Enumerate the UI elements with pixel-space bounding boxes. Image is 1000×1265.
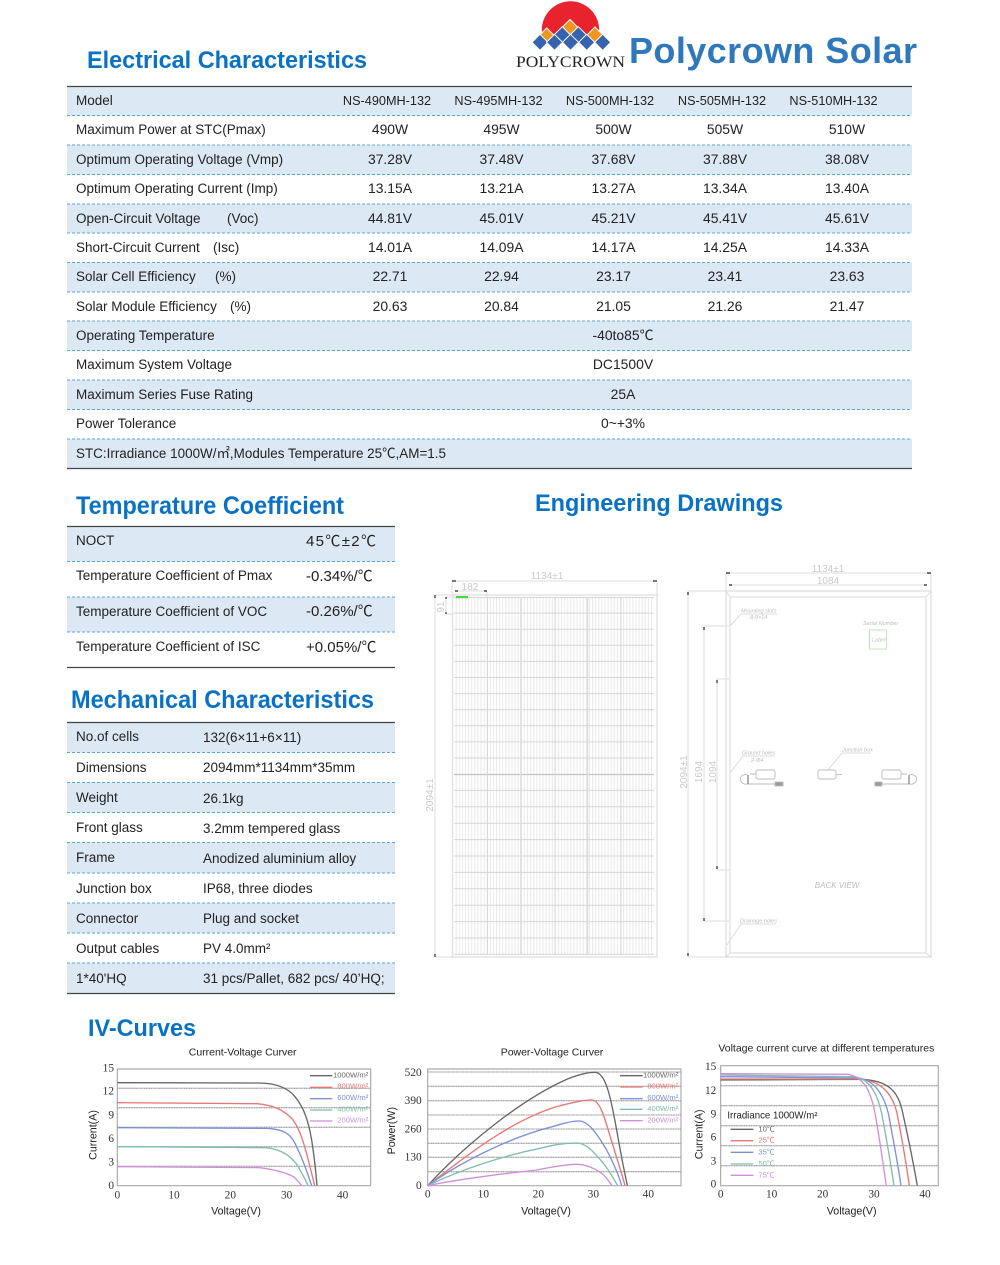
row: cell efficiency: Solar Cell Efficiency: [76, 269, 196, 284]
row: Imp: 13.21A: [479, 180, 524, 196]
note: mounting slots: [730, 608, 777, 626]
x axis ticks: [425, 1189, 654, 1201]
icon: right connector: [875, 770, 916, 786]
row: cell efficiency: 23.41: [708, 268, 743, 284]
legend: irradiance and temperatures: [727, 1111, 818, 1179]
row: module efficiency: [76, 298, 865, 314]
row: cell efficiency: [76, 268, 865, 284]
chart: power-voltage curve: [386, 1047, 681, 1218]
row: connector: [76, 911, 299, 926]
legend: 200W/m²: [647, 1115, 679, 1124]
legend: irradiance and temperatures: 25℃: [758, 1136, 775, 1145]
row: model: NS-495MH-132: [454, 94, 543, 108]
row: Pmax coefficient: -0.34%/℃: [306, 568, 373, 585]
row: Voc: 45.21V: [591, 210, 636, 226]
row: output cables: Output cables: [76, 941, 160, 956]
row: Pmax coefficient: Temperature Coefficient of Pmax: [76, 568, 273, 583]
heading: Temperature Coefficient: Temperature Coefficient: [76, 492, 345, 520]
x axis title: Voltage(V): [521, 1206, 571, 1218]
row: Vmp: 38.08V: [825, 151, 870, 167]
row: module efficiency: Solar Module Efficiency: [76, 299, 217, 314]
row: dimensions: [76, 760, 355, 775]
row: ISC coefficient: +0.05%/℃: [306, 639, 376, 656]
legend: 600W/m²: [647, 1093, 679, 1102]
row: Isc: 14.25A: [703, 239, 748, 255]
x axis ticks: 40: [643, 1189, 654, 1201]
row: front glass: [76, 820, 341, 836]
heading: Electrical Characteristics: Electrical Characteristics: [87, 47, 367, 74]
x axis ticks: 20: [533, 1189, 544, 1201]
row: Vmp: 37.48V: [479, 151, 524, 167]
dimension: cell height: 91: [436, 601, 447, 613]
x axis ticks: 30: [281, 1190, 293, 1202]
row: NOCT: [76, 533, 376, 550]
row: Vmp: 37.88V: [703, 151, 748, 167]
row: Isc: 14.33A: [825, 239, 870, 255]
x axis ticks: 10: [478, 1189, 489, 1201]
row: maximum power: 505W: [707, 121, 744, 137]
row: model: NS-510MH-132: [789, 94, 878, 108]
legend: 200W/m²: [337, 1116, 369, 1125]
row: Vmp: [76, 151, 870, 167]
legend: 800W/m²: [337, 1082, 369, 1091]
row: power tolerance: 0~+3%: [601, 415, 645, 431]
y axis ticks: [103, 1063, 114, 1192]
y axis ticks: 390: [405, 1095, 422, 1107]
row: maximum power: 500W: [595, 121, 633, 137]
chart: current-voltage curve: [88, 1047, 371, 1218]
y axis ticks: 12: [103, 1086, 114, 1098]
row: cells: No.of cells: [76, 729, 139, 744]
row: Imp: 13.15A: [368, 180, 413, 196]
note: drainage holes: [727, 918, 777, 945]
row: Isc: Short-Circuit Current: [76, 240, 200, 255]
row: maximum power: 490W: [372, 121, 409, 137]
x axis ticks: 20: [225, 1190, 236, 1202]
row: fuse rating: [76, 386, 636, 402]
note: serial number label: Serial Number: [863, 621, 899, 627]
curves: [117, 1083, 317, 1186]
y axis ticks: [705, 1061, 717, 1191]
row: weight: 26.1kg: [203, 791, 244, 806]
row: Imp: [76, 180, 870, 196]
row: Imp: Optimum Operating Current (Imp): [76, 181, 278, 196]
row: Imp: 13.40A: [825, 180, 870, 196]
row: front glass: 3.2mm tempered glass: [203, 821, 341, 836]
note: ground holes: [730, 750, 775, 773]
row: output cables: [76, 941, 271, 956]
row: model: NS-500MH-132: [566, 94, 654, 108]
note: junction box: [828, 748, 873, 770]
brand name: Polycrown Solar: [629, 30, 917, 71]
row: Vmp: 37.68V: [591, 151, 636, 167]
chart title: Voltage current curve at different temperatures: [718, 1044, 934, 1055]
row: NOCT: 45℃±2℃: [306, 533, 376, 550]
y axis ticks: 15: [103, 1063, 114, 1075]
heading: Engineering Drawings: Engineering Drawings: [535, 490, 783, 517]
y axis title: Current(A): [694, 1109, 706, 1159]
row: operating temperature: [76, 327, 654, 343]
note: mounting slots: 8-9×14: [750, 615, 767, 621]
y axis ticks: [405, 1067, 422, 1192]
legend: 1000W/m²: [643, 1070, 679, 1079]
heading: IV-Curves: IV-Curves: [88, 1015, 196, 1042]
x axis ticks: 30: [588, 1189, 599, 1201]
row: container: [76, 971, 385, 986]
chart: current-voltage at different temperatures: [694, 1044, 938, 1218]
x axis ticks: 0: [718, 1188, 724, 1200]
row: Isc: 14.09A: [479, 239, 524, 255]
dimension: back length: 2094±1: [679, 755, 690, 789]
y axis ticks: 9: [711, 1108, 717, 1120]
icon: central junction box: [818, 770, 842, 779]
row: model: NS-505MH-132: [678, 94, 766, 108]
row: Voc: 45.01V: [479, 210, 524, 226]
row: module efficiency: 21.05: [596, 298, 631, 314]
row: power tolerance: Power Tolerance: [76, 416, 176, 431]
row: front glass: Front glass: [76, 820, 143, 835]
row: weight: Weight: [76, 790, 118, 805]
row: Isc: 14.01A: [368, 239, 413, 255]
y axis ticks: 9: [108, 1110, 114, 1122]
row: fuse rating: 25A: [611, 386, 636, 402]
y axis ticks: 0: [108, 1180, 114, 1192]
row: Voc: [76, 210, 870, 226]
row: maximum power: [76, 121, 866, 137]
row: maximum power: Maximum Power at STC(Pmax): [76, 122, 266, 137]
row: model: Model: [76, 93, 113, 108]
legend: irradiance and temperatures: 10℃: [758, 1124, 775, 1133]
row: junction box: IP68, three diodes: [203, 881, 313, 896]
row: model: [76, 93, 878, 108]
x axis ticks: [718, 1188, 931, 1200]
x axis ticks: 0: [114, 1190, 120, 1202]
row: module efficiency: (%): [230, 299, 251, 314]
row: Imp: 13.34A: [703, 180, 748, 196]
heading: Mechanical Characteristics: Mechanical Characteristics: [71, 686, 374, 714]
curves: [721, 1074, 917, 1186]
row: Isc: (Isc): [213, 240, 239, 255]
logo: Polycrown emblem: POLYCROWN: [516, 54, 625, 71]
row: junction box: Junction box: [76, 881, 152, 896]
row: NOCT: NOCT: [76, 533, 114, 548]
row: maximum system voltage: Maximum System Voltage: [76, 357, 232, 372]
chart title: Power-Voltage Curver: [501, 1047, 604, 1058]
y axis ticks: 130: [405, 1152, 422, 1164]
legend: 600W/m²: [337, 1093, 369, 1102]
x axis ticks: 10: [766, 1188, 778, 1200]
y axis ticks: 15: [705, 1061, 717, 1073]
dimension: length: 2094±1: [425, 778, 436, 812]
dimension: back width: 1134±1: [812, 564, 845, 575]
y axis ticks: 6: [711, 1132, 717, 1144]
row: cell efficiency: 23.17: [596, 268, 631, 284]
panel: temperature coefficient table: [67, 526, 395, 668]
y axis ticks: 260: [405, 1123, 422, 1135]
y axis ticks: 0: [416, 1180, 422, 1192]
row: Voc: 45.41V: [703, 210, 748, 226]
row: VOC coefficient: Temperature Coefficient of VOC: [76, 604, 267, 619]
y axis ticks: 6: [108, 1133, 114, 1145]
row: module efficiency: 21.26: [708, 298, 743, 314]
legend: irradiance and temperatures: 50℃: [758, 1159, 775, 1168]
chart title: Current-Voltage Curver: [189, 1047, 297, 1058]
row: STC note: STC:Irradiance 1000W/㎡,Modules Temperature 25℃,AM=1.5: [76, 446, 446, 461]
row: container: 31 pcs/Pallet, 682 pcs/ 40’HQ;: [203, 971, 385, 986]
y axis title: Current(A): [88, 1110, 100, 1160]
x axis ticks: 40: [337, 1190, 349, 1202]
dimension: cell width: 182: [462, 582, 479, 593]
x axis ticks: 0: [425, 1189, 431, 1201]
icon: left connector: [740, 770, 783, 786]
x axis title: Voltage(V): [211, 1206, 261, 1218]
dimension: frame mounting width: 1084: [817, 576, 840, 587]
row: maximum power: 510W: [829, 121, 866, 137]
row: Vmp: 37.28V: [368, 151, 413, 167]
row: cell efficiency: 22.94: [484, 268, 519, 284]
row: operating temperature: Operating Temperature: [76, 328, 215, 343]
row: cells: 132(6×11+6×11): [203, 730, 301, 745]
row: Isc: [76, 239, 870, 255]
y axis ticks: 12: [705, 1085, 717, 1097]
note: ground holes: 2-Φ4: [750, 758, 764, 764]
row: maximum system voltage: [76, 356, 654, 372]
row: Voc: Open-Circuit Voltage: [76, 211, 201, 226]
legend: [310, 1070, 369, 1125]
row: dimensions: Dimensions: [76, 760, 147, 775]
row: VOC coefficient: -0.26%/℃: [306, 603, 373, 620]
row: cells: [76, 729, 301, 745]
y axis ticks: 3: [108, 1157, 114, 1169]
row: VOC coefficient: [76, 603, 373, 620]
row: ISC coefficient: [76, 639, 376, 656]
x axis ticks: 30: [868, 1188, 880, 1200]
curves: [428, 1072, 627, 1186]
row: frame: Frame: [76, 850, 115, 865]
x axis ticks: 20: [817, 1188, 829, 1200]
legend: 1000W/m²: [333, 1070, 369, 1079]
y axis ticks: 3: [711, 1156, 717, 1168]
note: drainage holes: Drainage holes: [740, 918, 777, 924]
row: module efficiency: 20.84: [484, 298, 519, 314]
row: cell efficiency: 23.63: [830, 268, 865, 284]
row: maximum system voltage: DC1500V: [593, 356, 654, 372]
row: output cables: PV 4.0mm²: [203, 941, 271, 956]
drawing: front view of module: [425, 571, 657, 957]
row: frame: [76, 850, 356, 866]
dimension: width: 1134±1: [531, 571, 564, 582]
note: serial number label: Label: [872, 638, 886, 644]
legend: irradiance and temperatures: 75℃: [758, 1170, 775, 1179]
note: back view: BACK VIEW: [815, 881, 861, 890]
note: mounting slots: Mounting slots: [741, 608, 777, 614]
panel: electrical characteristics table: [67, 86, 912, 468]
x axis ticks: 10: [168, 1190, 180, 1202]
row: maximum power: 495W: [483, 121, 521, 137]
note: ground holes: Ground holes: [742, 750, 775, 756]
row: dimensions: 2094mm*1134mm*35mm: [203, 760, 355, 775]
logo: Polycrown emblem: [516, 1, 625, 71]
row: Vmp: Optimum Operating Voltage (Vmp): [76, 152, 283, 167]
row: model: NS-490MH-132: [343, 94, 431, 108]
drawing: back view of module: [679, 564, 931, 957]
row: Voc: 44.81V: [368, 210, 413, 226]
row: cell efficiency: 22.71: [373, 268, 408, 284]
row: operating temperature: -40to85℃: [592, 327, 654, 343]
row: fuse rating: Maximum Series Fuse Rating: [76, 387, 253, 402]
legend: 800W/m²: [647, 1082, 679, 1091]
x axis ticks: 40: [919, 1188, 931, 1200]
row: frame: Anodized aluminium alloy: [203, 851, 356, 866]
row: power tolerance: [76, 415, 645, 431]
row: cell efficiency: (%): [215, 269, 236, 284]
dimension: 1094: 1094: [708, 760, 719, 783]
row: junction box: [76, 881, 313, 896]
row: connector: Plug and socket: [203, 911, 299, 926]
y axis ticks: 0: [711, 1179, 717, 1191]
row: Pmax coefficient: [76, 568, 373, 585]
row: Voc: (Voc): [227, 211, 259, 226]
legend: 400W/m²: [337, 1104, 369, 1113]
y axis title: Power(W): [386, 1107, 398, 1154]
note: junction box: Junction box: [841, 748, 873, 754]
row: connector: Connector: [76, 911, 139, 926]
row: Imp: 13.27A: [591, 180, 636, 196]
x axis title: Voltage(V): [827, 1206, 877, 1218]
row: module efficiency: 20.63: [373, 298, 408, 314]
row: Voc: 45.61V: [825, 210, 870, 226]
legend: irradiance and temperatures: 35℃: [758, 1147, 775, 1156]
row: module efficiency: 21.47: [830, 298, 865, 314]
y axis ticks: 520: [405, 1067, 422, 1079]
x axis ticks: [114, 1190, 349, 1202]
panel: mechanical characteristics table: [67, 722, 395, 994]
legend: 400W/m²: [647, 1104, 679, 1113]
dimension: 1694: 1694: [694, 760, 705, 783]
row: Isc: 14.17A: [591, 239, 636, 255]
row: ISC coefficient: Temperature Coefficient of ISC: [76, 639, 261, 654]
legend: [620, 1070, 679, 1124]
row: container: 1*40'HQ: [76, 971, 127, 986]
note: serial number label: [863, 621, 899, 649]
row: weight: [76, 790, 244, 806]
legend: irradiance and temperatures: Irradiance 1000W/m²: [727, 1111, 818, 1122]
